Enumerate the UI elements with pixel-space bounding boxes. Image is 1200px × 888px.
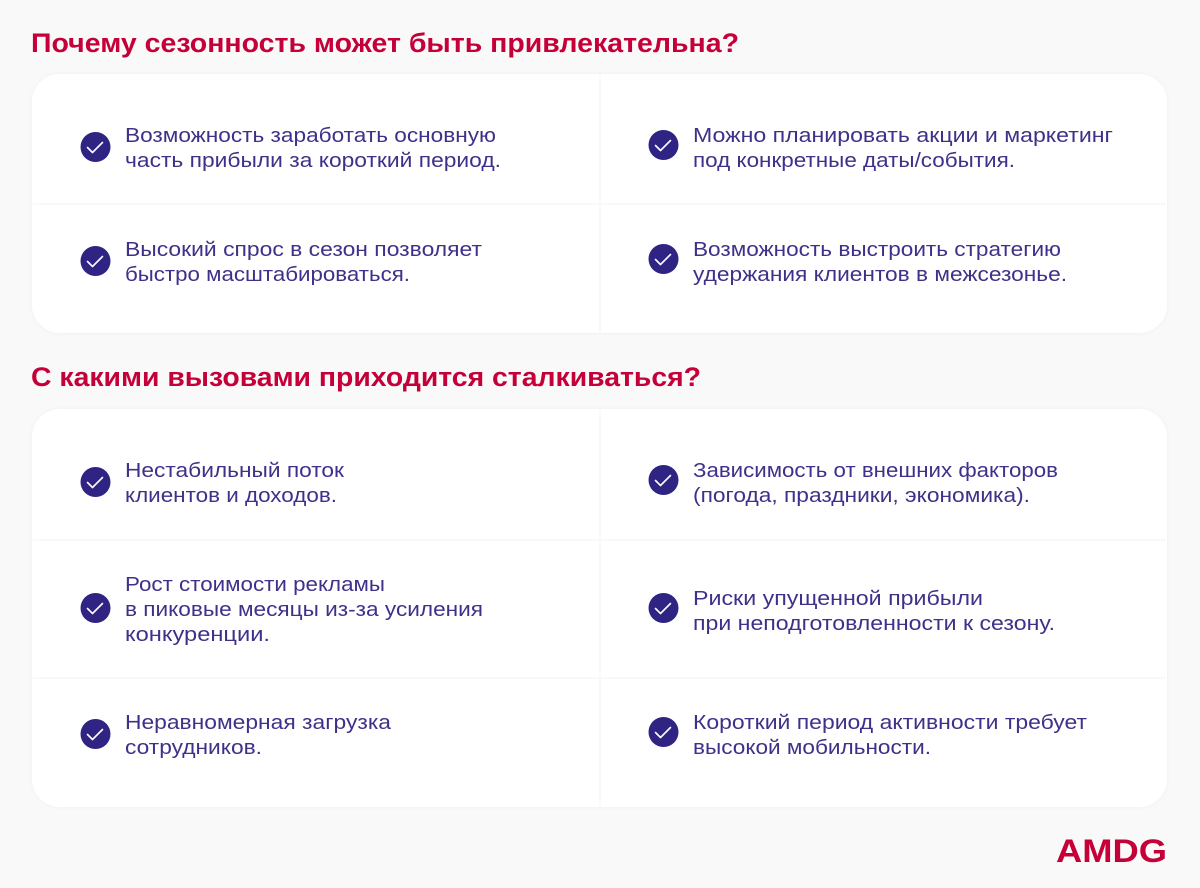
challenge: uneven staff workload	[80, 711, 392, 759]
benefit: high demand enables scaling: Высокий спрос в сезон позволяет	[125, 238, 483, 261]
benefit: off-season retention strategy: удержания клиентов в межсезонье.	[693, 263, 1067, 286]
challenge: missed profit risks: Риски упущенной прибыли	[693, 587, 983, 610]
challenge: rising advertising cost: конкуренции.	[125, 623, 270, 646]
challenge: short activity period requires mobility: высокой мобильности.	[693, 736, 931, 759]
challenge: rising advertising cost: Рост стоимости рекламы	[125, 573, 385, 596]
challenge: unstable flow of clients: клиентов и доходов.	[125, 484, 337, 507]
panel: challenges	[32, 409, 1167, 807]
benefit: main profit in a short period: Возможность заработать основную	[125, 124, 496, 147]
challenge: rising advertising cost	[80, 573, 483, 646]
benefit: high demand enables scaling: быстро масштабироваться.	[125, 263, 410, 286]
logo: AMDG: AMDG	[1056, 833, 1167, 869]
benefit: off-season retention strategy: Возможность выстроить стратегию	[693, 238, 1061, 261]
benefit: planning promotions and marketing: под конкретные даты/события.	[693, 149, 1015, 172]
challenge: uneven staff workload: Неравномерная загрузка	[125, 711, 392, 734]
benefit: high demand enables scaling	[80, 238, 483, 286]
challenge: uneven staff workload: сотрудников.	[125, 736, 262, 759]
benefit: off-season retention strategy	[648, 238, 1067, 286]
heading: challenges: С какими вызовами приходится сталкиваться?	[31, 362, 701, 392]
benefit: main profit in a short period: часть прибыли за короткий период.	[125, 149, 501, 172]
benefit: planning promotions and marketing: Можно планировать акции и маркетинг	[693, 124, 1113, 147]
challenge: external factors: Зависимость от внешних факторов	[693, 459, 1058, 482]
challenge: short activity period requires mobility	[648, 711, 1088, 759]
challenge: short activity period requires mobility: Короткий период активности требует	[693, 711, 1088, 734]
challenge: external factors	[648, 459, 1058, 507]
challenge: external factors: (погода, праздники, экономика).	[693, 484, 1030, 507]
benefit: planning promotions and marketing	[648, 124, 1113, 172]
challenge: missed profit risks: при неподготовленности к сезону.	[693, 612, 1055, 635]
challenge: missed profit risks	[648, 587, 1055, 635]
challenge: unstable flow of clients	[80, 459, 345, 507]
challenge: unstable flow of clients: Нестабильный поток	[125, 459, 345, 482]
panel: benefits	[32, 74, 1167, 333]
heading: why seasonality is attractive: Почему сезонность может быть привлекательна?	[31, 28, 739, 58]
challenge: rising advertising cost: в пиковые месяцы из-за усиления	[125, 598, 483, 621]
benefit: main profit in a short period	[80, 124, 501, 172]
